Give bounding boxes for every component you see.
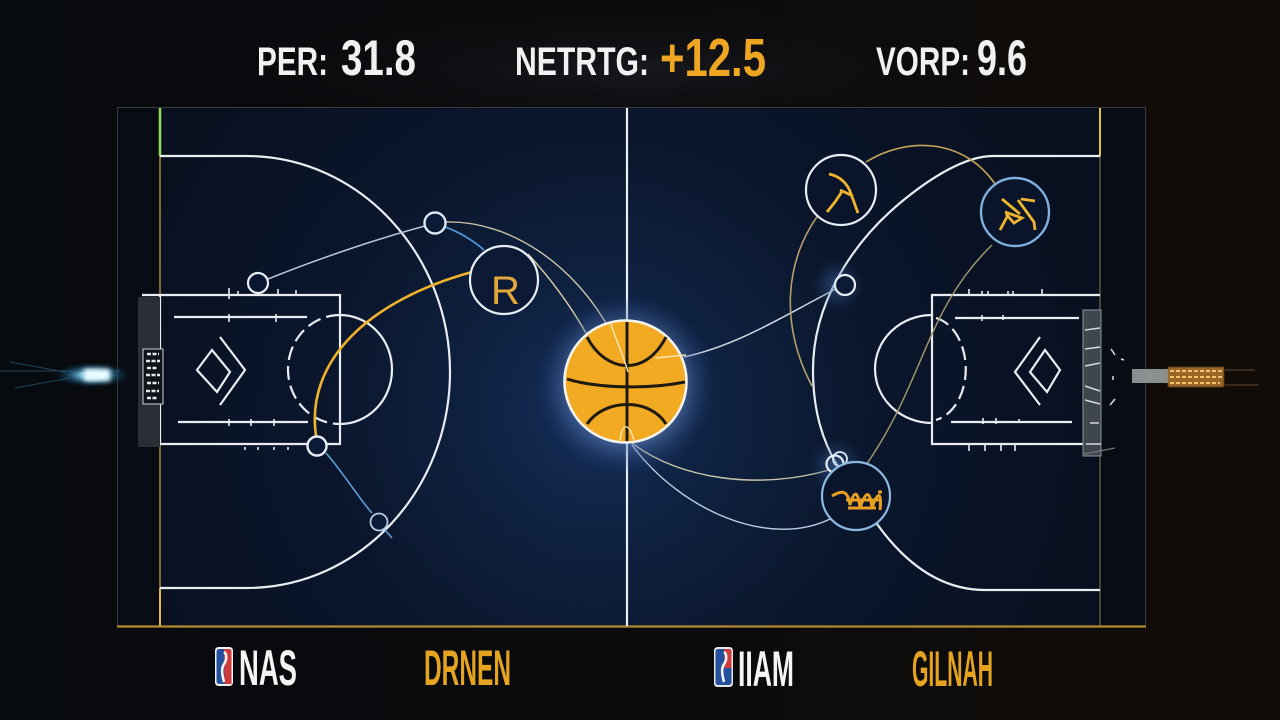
- stat: NETRTG: [515, 28, 766, 88]
- stats header: [257, 28, 1027, 88]
- stat: NETRTG: +12.5: [660, 28, 766, 88]
- right backboard: [1083, 310, 1124, 456]
- team label: NAS: NAS: [239, 640, 297, 696]
- left light beam: [0, 362, 132, 388]
- right half court markings: [813, 156, 1100, 590]
- player badge: R: R: [491, 269, 520, 313]
- left backboard: [138, 297, 163, 447]
- player badge: R: [470, 246, 538, 314]
- footer team labels: [215, 640, 993, 697]
- player node: corner: [370, 514, 388, 530]
- stat: VORP: 9.6: [977, 30, 1027, 86]
- player badge: scribble icon: [822, 462, 890, 530]
- stat: PER: [257, 30, 416, 86]
- stat: VORP: VORP:: [876, 40, 970, 84]
- infographic canvas: GILNAH: [912, 641, 993, 697]
- player node: lower right pair: [808, 438, 864, 494]
- player node: right wing: [812, 259, 864, 311]
- court surface: [117, 107, 1146, 627]
- team label: NAS: [215, 640, 297, 696]
- stat: VORP: [876, 30, 1027, 86]
- stat: PER: 31.8: [341, 30, 416, 86]
- stat: PER: PER:: [257, 40, 328, 84]
- player node: left wing: [248, 273, 268, 293]
- stat: NETRTG: NETRTG:: [515, 40, 649, 84]
- court border lines: [117, 108, 1146, 626]
- footer team labels: DRNEN: [424, 640, 511, 696]
- player node: baseline: [308, 436, 326, 456]
- play route lines: [268, 145, 995, 538]
- right light beam: [1132, 367, 1259, 387]
- player badge: hornet icon: [981, 178, 1049, 246]
- icon: league logo left: [215, 647, 233, 686]
- team label: IIAM: IIAM: [738, 641, 794, 697]
- player badge: wasp icon: [806, 155, 876, 225]
- icon: league logo right: [714, 647, 733, 687]
- basketball: [536, 295, 716, 475]
- player node: top: [424, 212, 446, 234]
- basketball court: [117, 107, 1146, 627]
- team label: IIAM: [714, 641, 794, 697]
- left half court markings: [142, 156, 450, 588]
